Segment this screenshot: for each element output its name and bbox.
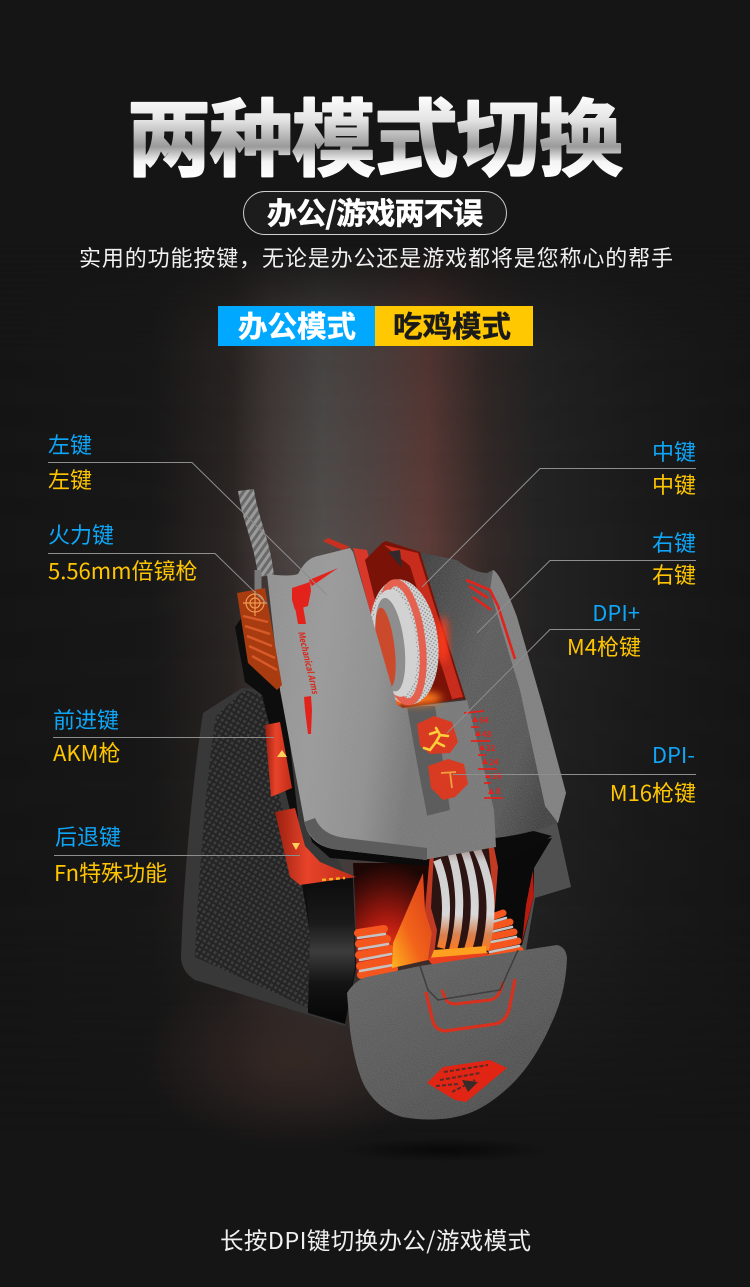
callout: left button: 左键 (48, 463, 92, 495)
callout: forward key (53, 703, 274, 768)
callout: forward key: 前进键 (53, 703, 119, 735)
callout: back key: 后退键 (55, 820, 121, 852)
callout: DPI minus: DPI- (652, 738, 695, 770)
palm grip shell (181, 688, 360, 1026)
DPI scale decals: 48 (482, 729, 492, 740)
DPI scale decals: 64 (479, 715, 489, 726)
callout: left button: 左键 (48, 428, 92, 460)
callout: forward key: AKM枪 (53, 736, 120, 768)
callout: back key (54, 820, 300, 888)
mode legend (218, 304, 533, 346)
rear shell (347, 945, 567, 1120)
left main button (267, 548, 427, 860)
callout: DPI plus (447, 596, 641, 733)
glowing cavity (353, 863, 430, 976)
left button red decal: Mechanical Arms (295, 630, 322, 696)
rear shell red U trims (420, 950, 518, 1031)
background (170, 260, 615, 1128)
callout: DPI plus: M4枪键 (567, 630, 641, 662)
left button red decal (292, 568, 338, 734)
callout: middle button: 中键 (652, 435, 696, 467)
DPI scale decals: 32 (486, 743, 496, 754)
callout: right button: 右键 (652, 526, 696, 558)
floor shadow (340, 1138, 550, 1162)
bridge base glow bar (427, 946, 487, 971)
callout: fire key: 火力键 (48, 518, 114, 550)
scroll wheel (363, 575, 445, 709)
glossy side panel (305, 880, 355, 1023)
office mode tab: 办公模式 (238, 304, 356, 346)
callouts (48, 428, 696, 888)
DPI scale decals: 16 (492, 771, 502, 782)
right main button (418, 552, 566, 838)
callout: right button (477, 526, 696, 633)
callout: back key: Fn特殊功能 (54, 856, 167, 888)
callout: middle button: 中键 (652, 468, 696, 500)
forward side button (265, 722, 292, 797)
right rear body (490, 823, 571, 950)
center strip (400, 700, 496, 860)
jaguar logo (427, 1060, 507, 1102)
DPI minus button (428, 759, 468, 800)
callout: right button: 右键 (652, 558, 696, 590)
T icon (441, 772, 456, 788)
target icon (243, 591, 267, 616)
side black body (235, 592, 356, 1024)
scroll wheel channel (323, 538, 465, 708)
game mode tab: 吃鸡模式 (393, 304, 511, 346)
footer note: 长按DPI键切换办公/游戏模式 (220, 1222, 531, 1256)
callout: DPI plus: DPI+ (592, 596, 640, 628)
right spring (490, 913, 520, 957)
callout: fire key (48, 518, 267, 604)
right button red decal (466, 580, 515, 659)
callout: DPI minus: M16枪键 (610, 776, 696, 808)
title: 两种模式切换 (127, 73, 623, 194)
center strip dark shade (407, 706, 450, 816)
central red bridge (423, 812, 498, 960)
callout: DPI minus (453, 738, 696, 808)
callout: left button (48, 428, 327, 595)
description line: 实用的功能按键，无论是办公还是游戏都将是您称心的帮手 (79, 241, 673, 273)
fire key (237, 588, 282, 690)
callout: fire key: 5.56mm倍镜枪 (48, 554, 198, 586)
subtitle pill: 办公/游戏两不误 (267, 189, 483, 233)
cable (246, 490, 266, 596)
orange bridge wall (392, 873, 432, 968)
palm grip mesh (195, 690, 310, 1008)
black band under buttons (300, 796, 552, 866)
DPI scale decals: 24 (489, 757, 499, 768)
back side button (275, 808, 356, 885)
left button lower bevel (304, 818, 427, 860)
mouse illustration (181, 490, 571, 1162)
left spring (358, 929, 394, 975)
silver coil bands (437, 838, 491, 950)
DPI scale decals: 8 (496, 786, 501, 797)
runner icon (424, 728, 448, 750)
DPI scale decals (464, 711, 503, 798)
DPI plus button (417, 716, 458, 754)
callout: middle button (422, 435, 696, 587)
